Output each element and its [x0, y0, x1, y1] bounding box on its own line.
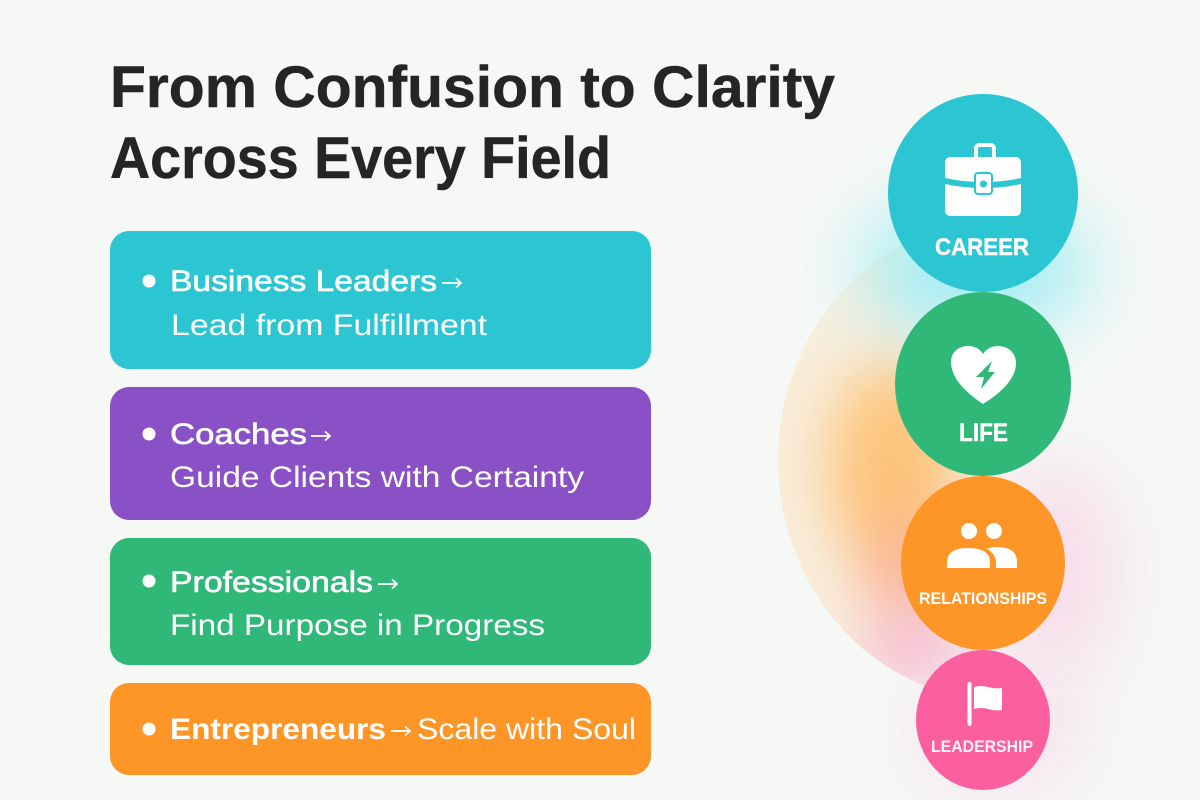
- panel: entrepreneurs: Entrepreneurs: [170, 713, 386, 746]
- panel: business leaders: [110, 231, 651, 369]
- panel: coaches: [110, 387, 651, 520]
- circle: life: [895, 292, 1071, 476]
- circle: relationships: RELATIONSHIPS: [919, 589, 1047, 608]
- icon: briefcase: [945, 145, 1021, 216]
- title: From Confusion to Clarity: [110, 55, 835, 120]
- panel: business leaders: Lead from Fulfillment: [171, 309, 488, 342]
- panel: entrepreneurs: [110, 683, 651, 775]
- glow: oval and soft colour halos: [778, 175, 1132, 798]
- circle: career: [888, 94, 1078, 292]
- panel: business leaders: Business Leaders: [170, 265, 437, 298]
- circle: relationships: [901, 476, 1065, 650]
- title: Across Every Field: [110, 126, 611, 191]
- icon: heart with bolt: [951, 346, 1016, 404]
- panel: professionals: Professionals: [170, 566, 373, 599]
- panel: coaches: Coaches: [170, 418, 307, 451]
- icon: flag: [968, 682, 1002, 726]
- circle: leadership: [916, 650, 1050, 790]
- panel: entrepreneurs: Scale with Soul: [417, 713, 636, 746]
- circle: life: LIFE: [959, 419, 1008, 447]
- panel: professionals: [110, 538, 651, 665]
- panel: professionals: Find Purpose in Progress: [170, 609, 545, 642]
- circle: leadership: LEADERSHIP: [931, 737, 1033, 756]
- title: [110, 55, 835, 191]
- circle: career: CAREER: [935, 234, 1029, 261]
- panel: coaches: Guide Clients with Certainty: [170, 461, 584, 494]
- icon: two people: [947, 523, 1017, 568]
